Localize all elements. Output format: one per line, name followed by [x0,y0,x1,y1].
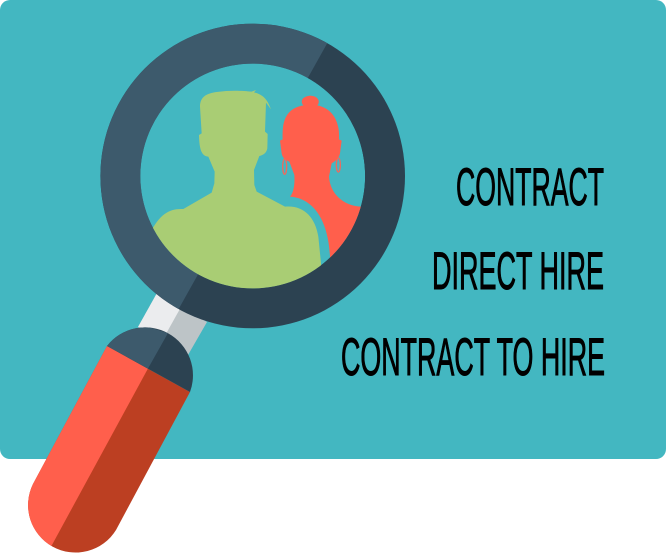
magnifier handle [28,346,190,553]
icon: magnifying glass [28,24,405,553]
magnifier ring [100,24,405,328]
silhouette: woman [280,96,361,258]
silhouette: man [150,90,322,303]
magnifier handle cap [107,327,193,392]
magnifier stem [138,293,207,355]
lens with two silhouettes [140,64,365,288]
